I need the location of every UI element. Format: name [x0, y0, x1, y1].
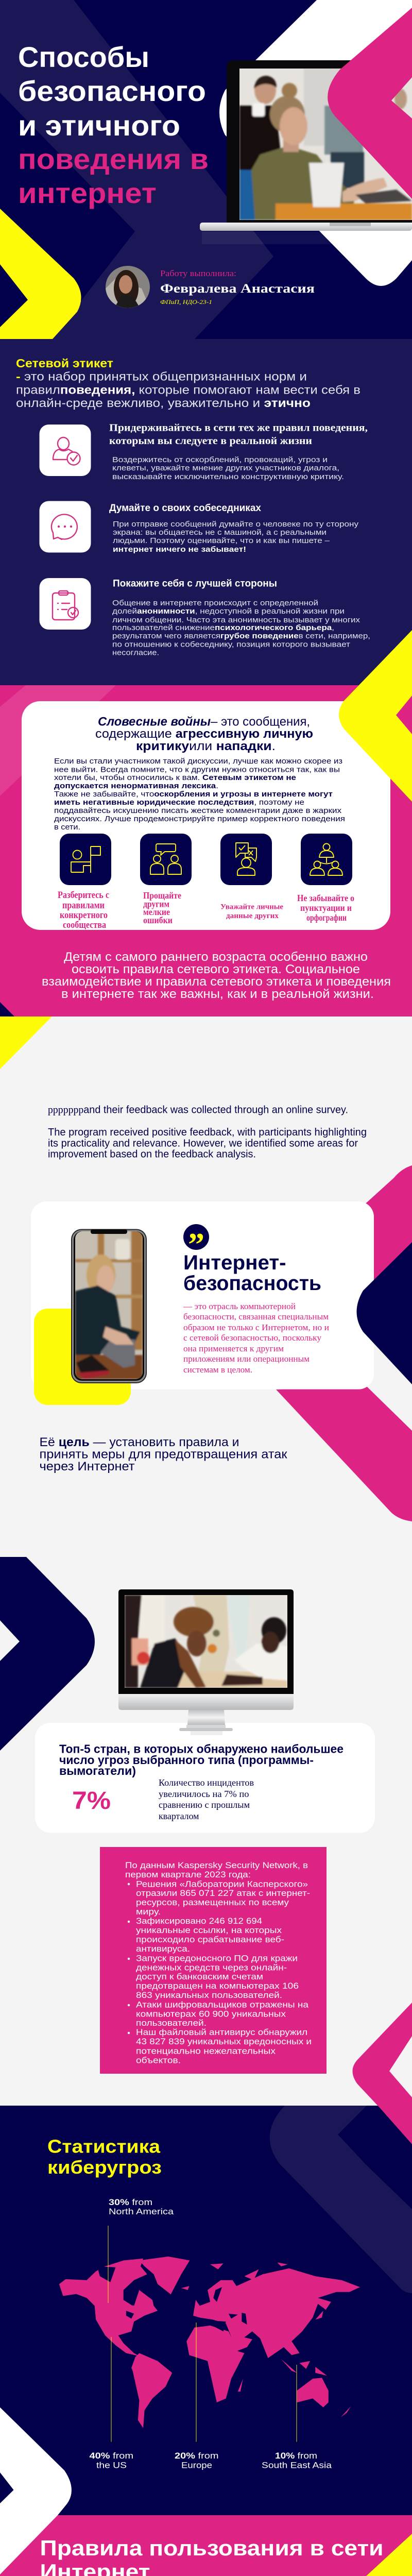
- heading: usage rules: Правила пользования в сети: [40, 2536, 383, 2560]
- word wars body text: поддавайтесь искушению писать жесткие комментарии даже в жарких: [54, 806, 342, 815]
- label: forgive mistakes: Прощайте: [143, 890, 181, 901]
- rule three: результатом чего является грубое поведение в сети, например,: [112, 632, 370, 640]
- label: North America: North America: [109, 2207, 174, 2216]
- label: forgive mistakes: [143, 890, 181, 925]
- rule two: При отправке сообщений думайте о человеке по ту сторону: [113, 520, 359, 529]
- author credit: ФПиП, НДО-23-1: [160, 298, 212, 306]
- label: the US: 40% from: [90, 2451, 133, 2461]
- bullet list: миру.: [136, 1907, 161, 1917]
- children paragraph: взаимодействие и правила сетевого этикета и поведения: [42, 975, 391, 989]
- label: respect personal data: [220, 903, 283, 920]
- rule three: личном общении. Часто эта анонимность вызывает у многих: [112, 616, 360, 624]
- label: community rules: [58, 890, 109, 930]
- label: community rules: сообщества: [63, 920, 106, 930]
- label: forgive mistakes: мелкие: [143, 907, 170, 917]
- label: respect personal data: данные других: [226, 912, 279, 920]
- title: и этичного: [18, 109, 180, 142]
- heading: internet security: Интернет-: [183, 1251, 286, 1274]
- heading: statistics: [47, 2136, 162, 2178]
- panel: internet security card: [31, 1201, 374, 1405]
- feedback text: its practicality and relevance. However, we identified some areas for: [48, 1138, 358, 1149]
- title: поведения в: [18, 143, 209, 175]
- laptop with photo: [200, 60, 412, 244]
- icon: quote mark: ”: [188, 1226, 204, 1263]
- children paragraph: освоить правила сетевого этикета. Социальное: [72, 962, 360, 976]
- label: community rules: конкретного: [60, 910, 108, 921]
- internet security definition: она применяется к другим: [183, 1344, 284, 1353]
- heading: statistics: Статистика: [47, 2136, 161, 2157]
- bullet list: предотвращен на компьютерах 106: [136, 1981, 299, 1991]
- author credit: Работу выполнила:: [160, 268, 236, 278]
- stat: 7%: 7%: [72, 1787, 111, 1815]
- map leader lines: [108, 2226, 297, 2442]
- label: community rules: правилами: [62, 900, 105, 911]
- heading: network etiquette: Сетевой этикет: [16, 357, 113, 370]
- etiquette definition: онлайн-среде вежливо, уважительно и этично: [16, 396, 311, 410]
- panel: word wars background: [0, 685, 412, 1016]
- goal text: Её цель — установить правила и: [39, 1435, 239, 1449]
- internet security definition: системам в целом.: [183, 1365, 252, 1375]
- feedback text: pppppppand their feedback was collected through an online survey.: [48, 1105, 348, 1116]
- panel: top-5 card: [35, 1723, 375, 1833]
- rule two: людьми. Поэтому оценивайте, что и как вы пишете –: [113, 536, 330, 545]
- internet security definition: [183, 1301, 329, 1375]
- label: community rules: Разберитесь с: [58, 890, 109, 901]
- rule one: клеветы, уважайте мнение других участников диалога,: [112, 464, 339, 472]
- bullet list: [128, 1879, 312, 2065]
- etiquette definition: правил поведения, которые помогают нам вести себя в: [16, 383, 360, 397]
- label: North America: 30% from: [109, 2197, 152, 2207]
- title: Способы: [18, 41, 149, 73]
- word wars body text: нее выйти. Всегда помните, что к другим нужно относиться так, как вы: [54, 766, 340, 774]
- panel: internet usage rules: [0, 2515, 412, 2576]
- children paragraph: в интернете так же важны, как и в реальной жизни.: [61, 987, 374, 1001]
- author photo: [106, 266, 150, 308]
- bullet list: доступ к банковским счетам: [136, 1972, 263, 1981]
- rule one: [109, 422, 368, 481]
- bullet list: 43 827 839 уникальных вредоносных и: [136, 2037, 312, 2046]
- icon: quote mark: [183, 1224, 209, 1263]
- rule three: Покажите себя с лучшей стороны: [113, 578, 277, 589]
- icon: network of people: [301, 834, 352, 885]
- author credit: Февралева Анастасия: [160, 282, 315, 296]
- bullet list: Запуск вредоносного ПО для кражи: [136, 1954, 298, 1963]
- top-5 heading: [59, 1742, 344, 1777]
- panel: word wars card: [22, 701, 390, 930]
- feedback text: The program received positive feedback, with participants highlighting: [48, 1127, 367, 1138]
- bullet list: отразили 865 071 227 атак с интернет-: [136, 1888, 310, 1898]
- icon: two people talking: [140, 834, 192, 885]
- etiquette definition: - это набор принятых общепризнанных норм и: [16, 370, 307, 383]
- word wars body text: Если вы стали участником такой дискуссии, лучше как можно скорее из: [54, 757, 342, 766]
- internet security definition: — это отрасль компьютерной: [183, 1301, 296, 1311]
- bullet list: Решения «Лаборатории Касперского»: [136, 1879, 308, 1889]
- rule two: интернет ничего не забывает!: [113, 545, 246, 554]
- word wars body text: Также не забывайте, что оскорбления и угрозы в интернете могут: [54, 790, 333, 799]
- bullet list: денежных средств через онлайн-: [136, 1963, 287, 1973]
- panel: Kaspersky stats: первом квартале 2023 года:: [125, 1870, 251, 1879]
- feedback text: [48, 1105, 367, 1160]
- panel: light section: [0, 1016, 412, 2106]
- rule one: которым вы следуете в реальной жизни: [109, 435, 312, 447]
- panel: Kaspersky stats: По данным Kaspersky Security Network, в: [125, 1860, 308, 1870]
- label: punctuation: пунктуации и: [300, 903, 352, 913]
- word wars body text: [54, 757, 345, 832]
- title: [18, 41, 209, 209]
- label: the US: the US: [96, 2461, 127, 2470]
- rule two: экрана: вы общаетесь не с машиной, а с реальными: [113, 528, 327, 537]
- bullet list: компьютерах 60 900 уникальных: [136, 2009, 286, 2019]
- label: punctuation: орфографии: [306, 912, 347, 923]
- bullet list: Атаки шифровальщиков отражены на: [136, 2000, 309, 2010]
- navy chevron left: [0, 1557, 95, 1751]
- panel: cyber threat statistics: [0, 2106, 412, 2574]
- word wars heading: [95, 715, 313, 753]
- word wars body text: иметь негативные юридические последствия , поэтому не: [54, 798, 304, 807]
- heading: internet security: [183, 1251, 321, 1295]
- icon: personal data: [220, 834, 272, 885]
- children paragraph: Детям с самого раннего возраста особенно важно: [64, 950, 368, 964]
- word wars body text: дискуссиях. Лучше продемонстрируйте пример корректного поведения: [54, 815, 345, 823]
- pink chevron behind card: [276, 1165, 412, 1521]
- label: punctuation: Не забывайте о: [297, 893, 354, 903]
- stat caption: увеличилось на 7% по: [159, 1789, 249, 1799]
- top-5 heading: вымогатели): [59, 1764, 136, 1777]
- bullet list: ресурсов, размещенных по всему: [136, 1897, 289, 1907]
- internet security definition: безопасности, связанная специальным: [183, 1312, 329, 1321]
- bullet list: происходило срабатывание веб-: [136, 1935, 284, 1944]
- label: South East Asia: South East Asia: [262, 2461, 332, 2470]
- panel: network etiquette: [0, 339, 412, 685]
- phone with photo: [71, 1229, 147, 1383]
- monitor with photo: [118, 1589, 294, 1735]
- bullet list: Наш файловый антивирус обнаружил: [136, 2027, 307, 2037]
- label: forgive mistakes: ошибки: [143, 915, 173, 925]
- bullet list: антивируса.: [136, 1944, 190, 1954]
- world map: [59, 2257, 360, 2428]
- children paragraph: [42, 950, 391, 1001]
- label: Europe: Europe: [181, 2461, 212, 2470]
- top-5 heading: число угроз выбранного типа (программы-: [59, 1753, 314, 1767]
- rule two: [109, 503, 359, 554]
- bullet list: уникальные ссылки, на которых: [136, 1925, 282, 1935]
- rule three: [112, 578, 370, 657]
- stat caption: Количество инцидентов: [159, 1777, 254, 1788]
- icon: clipboard: [39, 578, 91, 630]
- label: Europe: 20% from: [175, 2451, 218, 2461]
- internet security definition: с сетевой безопасностью, поскольку: [183, 1333, 321, 1343]
- stat caption: кварталом: [159, 1811, 199, 1821]
- internet security definition: приложениям или операционным: [183, 1354, 310, 1364]
- bullet list: Зафиксировано 246 912 694: [136, 1916, 262, 1926]
- label: punctuation: [297, 893, 354, 923]
- navy chevron right: [356, 1242, 412, 1384]
- word wars body text: в сети.: [54, 823, 80, 832]
- pink chevron over navy: [352, 2003, 412, 2144]
- stat caption: [159, 1777, 254, 1821]
- word wars heading: критику или нападки .: [136, 739, 276, 753]
- rule three: пользователей снижение психологического барьера ,: [112, 623, 334, 632]
- goal text: [39, 1435, 287, 1473]
- etiquette definition: [16, 370, 360, 410]
- bullet list: объектов.: [136, 2056, 181, 2065]
- icon: community rules: [60, 834, 111, 885]
- panel: hero background: [0, 0, 412, 339]
- goal text: принять меры для предотвращения атак: [39, 1448, 287, 1461]
- rule three: несогласие.: [112, 648, 159, 657]
- panel: Kaspersky stats: [100, 1847, 327, 2074]
- goal text: через Интернет: [39, 1460, 135, 1473]
- bullet list: потенциально нежелательных: [136, 2046, 276, 2056]
- label: forgive mistakes: другим: [143, 899, 169, 909]
- label: North America: [109, 2197, 174, 2216]
- label: respect personal data: Уважайте личные: [220, 903, 283, 911]
- top-5 heading: Топ-5 стран, в которых обнаружено наибольшее: [59, 1742, 344, 1756]
- rule three: по отношению к собеседнику, позиция которого вызывает: [112, 640, 350, 649]
- rule three: долей анонимности , недоступной в реальной жизни при: [112, 607, 345, 616]
- yellow block: [34, 1309, 131, 1405]
- word wars heading: содержащие агрессивную личную: [95, 727, 313, 741]
- internet security definition: образом не только с Интернетом, но и: [183, 1323, 329, 1332]
- word wars body text: допускается ненормативная лексика .: [54, 782, 218, 790]
- label: South East Asia: 10% from: [275, 2451, 317, 2461]
- heading: statistics: киберугроз: [47, 2157, 162, 2178]
- icon: person with check: [39, 425, 91, 476]
- word wars body text: хотели бы, чтобы относились к вам. Сетевым этикетом не: [54, 773, 296, 782]
- rule one: Воздержитесь от оскорблений, провокаций, угроз и: [112, 455, 328, 464]
- rule one: Придерживайтесь в сети тех же правил поведения,: [109, 422, 368, 434]
- rule one: высказывайте исключительно конструктивную критику.: [112, 472, 344, 481]
- title: безопасного: [18, 75, 206, 107]
- yellow chevron: [339, 630, 412, 802]
- feedback text: improvement based on the feedback analysis.: [48, 1149, 256, 1160]
- icon: chat bubble: [39, 501, 91, 552]
- bullet list: пользователей.: [136, 2018, 207, 2028]
- word wars heading: Словесные войны– это сообщения,: [98, 715, 310, 728]
- title: интернет: [18, 177, 157, 209]
- heading: usage rules: [40, 2536, 383, 2576]
- heading: internet security: безопасность: [183, 1272, 321, 1295]
- label: the US: [90, 2451, 133, 2470]
- bullet list: 863 уникальных пользователей.: [136, 1990, 282, 2000]
- author credit: [160, 268, 315, 306]
- rule two: Думайте о своих собеседниках: [109, 503, 261, 514]
- label: Europe: [175, 2451, 218, 2470]
- stat caption: сравнению с прошлым: [159, 1800, 250, 1810]
- pink chevron: [328, 8, 412, 199]
- label: South East Asia: [262, 2451, 332, 2470]
- rule three: Общение в интернете происходит с определенной: [112, 599, 318, 607]
